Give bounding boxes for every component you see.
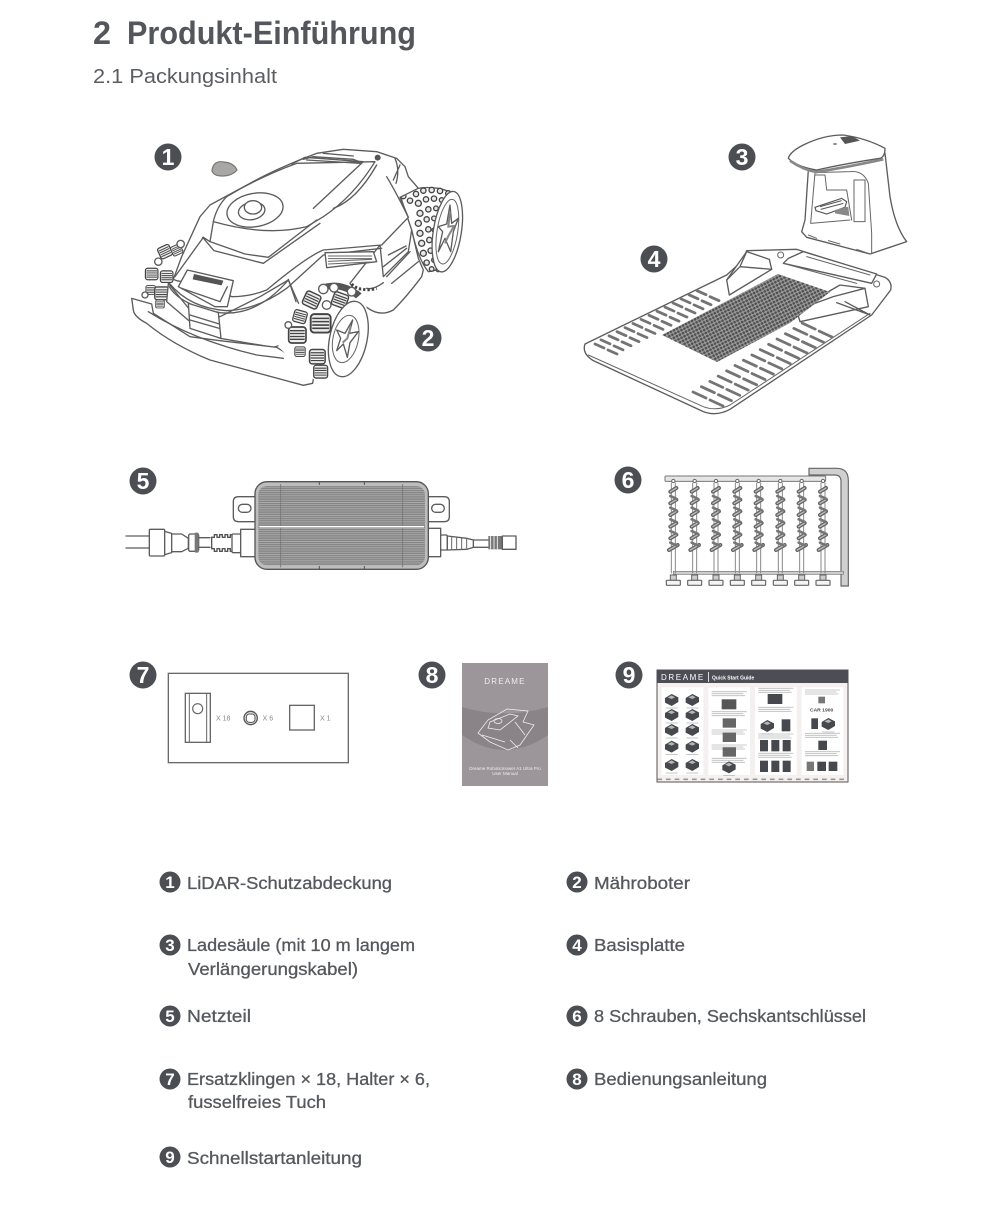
left wheel tread — [142, 240, 186, 310]
illustration: base plate — [584, 249, 891, 414]
top panel — [213, 162, 375, 231]
hex key — [809, 468, 848, 586]
item 9: 9 — [165, 1148, 175, 1167]
badge 3: 3 — [736, 144, 748, 170]
badge 1 — [154, 144, 182, 170]
item 2: 2 — [572, 873, 582, 892]
item 4: 4 — [572, 936, 582, 955]
front wheel tread — [278, 283, 370, 385]
right ramp — [797, 285, 868, 322]
item 8: 8 — [572, 1070, 582, 1089]
slot — [854, 180, 865, 222]
illustration: quick start guide: DREAME — [661, 673, 705, 682]
item 4 — [566, 934, 685, 956]
item 4: Basisplatte — [594, 935, 685, 955]
left slats — [595, 291, 719, 354]
item 3: Ladesäule (mit 10 m langem — [187, 935, 415, 955]
right slats — [693, 323, 832, 406]
icon: LiDAR cover — [212, 162, 237, 176]
item 2 — [566, 872, 690, 893]
badge 8 — [418, 662, 446, 688]
item 7: Ersatzklingen × 18, Halter × 6, — [187, 1069, 430, 1089]
adapter body — [255, 482, 428, 569]
badge 7: 7 — [137, 662, 149, 688]
badge 5 — [130, 468, 156, 494]
badge 7 — [130, 662, 156, 688]
badge 4 — [640, 246, 668, 272]
item 5: Netzteil — [187, 1006, 251, 1026]
illustration: charging station — [788, 135, 907, 254]
illustration: user manual: User Manual — [492, 771, 518, 776]
badge 3 — [728, 144, 756, 170]
subtitle: 2.1 Packungsinhalt — [93, 66, 277, 88]
item 3 — [160, 934, 415, 979]
item 7: fusselfreies Tuch — [188, 1092, 326, 1112]
guide pages: CAR 1900 — [810, 708, 833, 714]
item 3: 3 — [165, 936, 175, 955]
plug — [126, 529, 241, 556]
lower chassis — [167, 280, 300, 347]
badge 8: 8 — [426, 662, 439, 688]
body skirt — [350, 230, 423, 313]
illustration: user manual: DREAME — [484, 677, 526, 686]
post details — [808, 171, 872, 253]
item 3: Verlängerungskabel) — [188, 959, 358, 979]
illustration: power adapter — [126, 482, 516, 569]
vent — [325, 252, 377, 268]
bumper — [132, 298, 315, 385]
illustration: screws and hex key — [665, 468, 848, 586]
manual small print: Dreame Roboticmower A1 Ultra Pro — [469, 766, 541, 771]
item 1: 1 — [165, 873, 175, 892]
main shell — [173, 149, 418, 297]
label x18: X 18 — [216, 716, 230, 723]
badge 5: 5 — [137, 468, 150, 494]
mesh — [662, 274, 830, 362]
item 9: Schnellstartanleitung — [187, 1148, 362, 1168]
badge 2: 2 — [422, 325, 434, 351]
lugs — [233, 497, 257, 522]
icon: blade — [185, 693, 210, 742]
item 6: 8 Schrauben, Sechskantschlüssel — [594, 1006, 866, 1026]
item 5: 5 — [165, 1007, 175, 1026]
LiDAR dome — [224, 189, 286, 231]
left ramp — [727, 252, 772, 295]
neck left — [241, 529, 257, 557]
lower bar — [673, 571, 843, 574]
icon: cloth — [290, 705, 314, 730]
output cable — [441, 535, 516, 550]
illustration: robot mower — [132, 149, 468, 385]
item 8: Bedienungsanleitung — [594, 1069, 767, 1089]
legend — [160, 872, 866, 1168]
cap — [788, 135, 885, 172]
illustration: user manual — [462, 663, 548, 786]
screws — [666, 479, 830, 585]
title: Produkt-Einführung — [127, 15, 416, 51]
illustration: quick start guide — [657, 670, 848, 782]
item 7: 7 — [165, 1070, 175, 1089]
badge 4: 4 — [648, 246, 661, 272]
icon: holder — [244, 711, 257, 725]
icon: mower sketch — [478, 709, 534, 750]
label x6: X 6 — [263, 716, 273, 723]
badge 2 — [414, 324, 442, 352]
title: 2 — [93, 15, 111, 51]
badge 6: 6 — [622, 467, 634, 493]
front handle — [178, 270, 233, 307]
item 2: Mähroboter — [594, 873, 690, 893]
item 7 — [160, 1068, 430, 1112]
neck right — [427, 528, 441, 557]
front wheel — [322, 298, 375, 380]
item 5 — [160, 1006, 251, 1026]
plate outline — [584, 249, 891, 414]
badge 1: 1 — [162, 144, 175, 170]
charging contact — [815, 198, 849, 216]
post body — [802, 153, 907, 254]
top bar — [665, 476, 826, 481]
illustration: spare parts box — [168, 673, 348, 763]
rear wheel tread — [400, 187, 468, 274]
illustration: quick start guide: Quick Start Guide — [712, 676, 754, 682]
guide pages — [657, 687, 847, 779]
front panel — [188, 303, 221, 338]
top bar — [783, 252, 877, 283]
label x1: X 1 — [320, 716, 331, 723]
item 6: 6 — [572, 1007, 582, 1026]
badge 9: 9 — [623, 662, 635, 688]
badge 9 — [616, 662, 642, 688]
hood lines — [175, 220, 320, 277]
badge 6 — [614, 466, 642, 494]
item 1: LiDAR-Schutzabdeckung — [187, 873, 392, 893]
